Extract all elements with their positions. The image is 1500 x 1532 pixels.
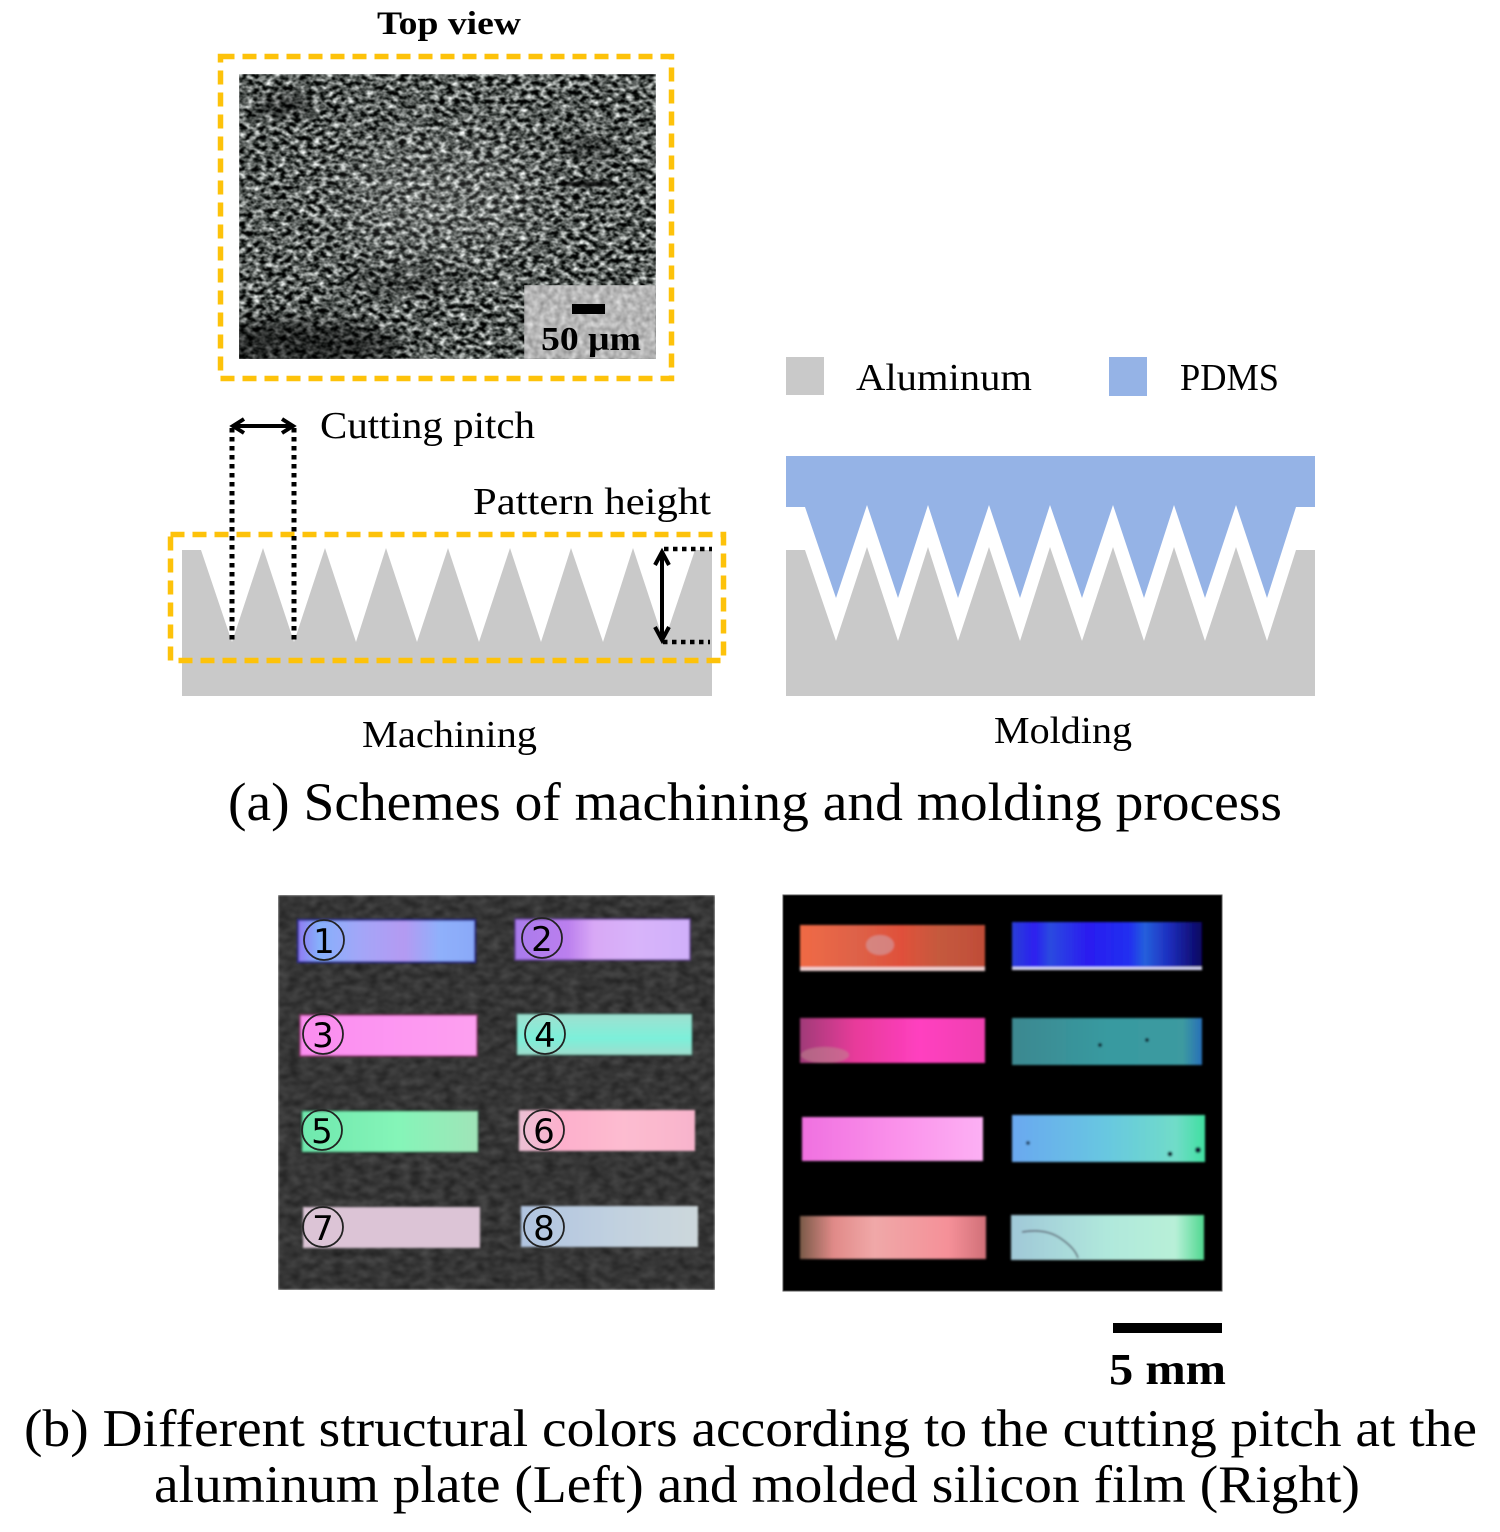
arrow: pattern height xyxy=(655,552,669,640)
photo: aluminum plate with eight colored patches xyxy=(278,895,715,1290)
film patch 5 xyxy=(802,1117,983,1161)
aluminum serrated profile xyxy=(182,548,712,696)
film patch 4 xyxy=(1012,1018,1202,1065)
number markers 1 to 8: 3 xyxy=(312,1016,334,1056)
patch 4 xyxy=(517,1014,692,1055)
diagram: machining cross-section xyxy=(170,419,724,696)
caption: panel b: (b) Different structural colors according to the cutting pitch at the xyxy=(24,1400,1477,1458)
scale bar: 5 mm xyxy=(1109,1323,1226,1394)
aluminum mold xyxy=(786,547,1315,696)
film patch 1 xyxy=(800,925,985,971)
label: Cutting pitch: Cutting pitch xyxy=(320,405,535,447)
label: Molding: Molding xyxy=(994,710,1132,752)
inset: scale bar 50 µm: 50 μm xyxy=(541,321,641,358)
patch 8 xyxy=(521,1206,698,1247)
number markers 1 to 8: 6 xyxy=(533,1112,555,1152)
patch 6 xyxy=(519,1110,695,1151)
number markers 1 to 8: 2 xyxy=(531,920,553,960)
patch 2 xyxy=(515,919,690,960)
PDMS replica xyxy=(786,456,1315,598)
label: PDMS: PDMS xyxy=(1180,357,1279,399)
film patch 8 xyxy=(1011,1215,1204,1260)
label: Machining: Machining xyxy=(362,714,537,756)
patch 3 xyxy=(300,1015,477,1056)
diagram: molding cross-section xyxy=(786,456,1315,696)
dotted guides: pattern height xyxy=(663,549,712,642)
inset: scale bar 50 µm xyxy=(524,285,656,359)
patch 1 xyxy=(298,920,475,962)
film patch 2 xyxy=(1012,922,1202,970)
label: Pattern height: Pattern height xyxy=(473,481,711,523)
scale bar: 5 mm: 5 mm xyxy=(1109,1345,1226,1394)
number markers 1 to 8: 7 xyxy=(312,1209,334,1249)
dashed frame: top view xyxy=(220,56,672,378)
legend: materials xyxy=(786,357,1279,399)
caption: panel a: (a) Schemes of machining and molding process xyxy=(228,772,1282,832)
label: Aluminum: Aluminum xyxy=(856,357,1032,399)
arrow: cutting pitch xyxy=(233,419,293,433)
caption: panel b xyxy=(24,1400,1477,1514)
number markers 1 to 8: 5 xyxy=(311,1112,333,1152)
number markers 1 to 8 xyxy=(302,918,565,1249)
film patch 6 xyxy=(1012,1115,1205,1162)
swatch: aluminum xyxy=(786,357,824,395)
dotted guides: cutting pitch xyxy=(232,428,294,643)
heading: Top view: Top view xyxy=(377,6,521,42)
swatch: PDMS xyxy=(1109,357,1147,396)
patch 7 xyxy=(303,1207,480,1248)
micrograph: top view of machined surface xyxy=(239,74,656,359)
patch 5 xyxy=(302,1111,478,1152)
film patch 7 xyxy=(800,1216,986,1259)
film patch 3 xyxy=(800,1018,985,1063)
photo: molded silicon film with eight colored patches xyxy=(783,895,1222,1291)
number markers 1 to 8: 8 xyxy=(533,1209,555,1249)
number markers 1 to 8: 4 xyxy=(534,1016,556,1056)
dashed frame: pattern region xyxy=(170,534,724,660)
number markers 1 to 8: 1 xyxy=(313,922,335,962)
caption: panel b: aluminum plate (Left) and molded silicon film (Right) xyxy=(154,1456,1360,1514)
